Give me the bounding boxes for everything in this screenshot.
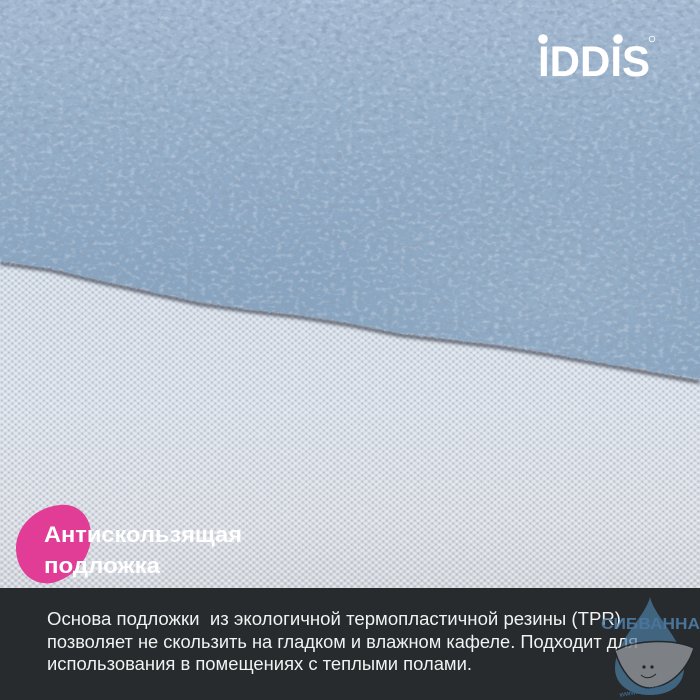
description text: использования в помещениях с теплыми полами. <box>47 654 472 674</box>
heading: anti-slip backing <box>44 522 242 578</box>
bottom dark band <box>0 588 700 700</box>
description text: позволяет не скользить на гладком и влажном кафеле. Подходит для <box>47 632 638 652</box>
watermark: drop and bathtub <box>601 597 700 699</box>
photo: shadow under the mat edge <box>0 263 700 382</box>
heading: anti-slip backing: подложка <box>44 553 161 578</box>
logo: IDDIS: IDDIS <box>538 38 650 86</box>
watermark: drop and bathtub: www.sibvanna.ru <box>618 682 677 699</box>
heading: anti-slip backing: Антискользящая <box>44 522 242 547</box>
photo: blue plush mat <box>0 0 700 390</box>
description text <box>47 609 638 674</box>
watermark: drop and bathtub: СИБВАННА <box>601 616 700 633</box>
photo: white woven backing <box>0 240 700 590</box>
pink blob badge <box>16 505 91 583</box>
description text: Основа подложки из экологичной термопластичной резины (TPR) <box>47 609 621 629</box>
